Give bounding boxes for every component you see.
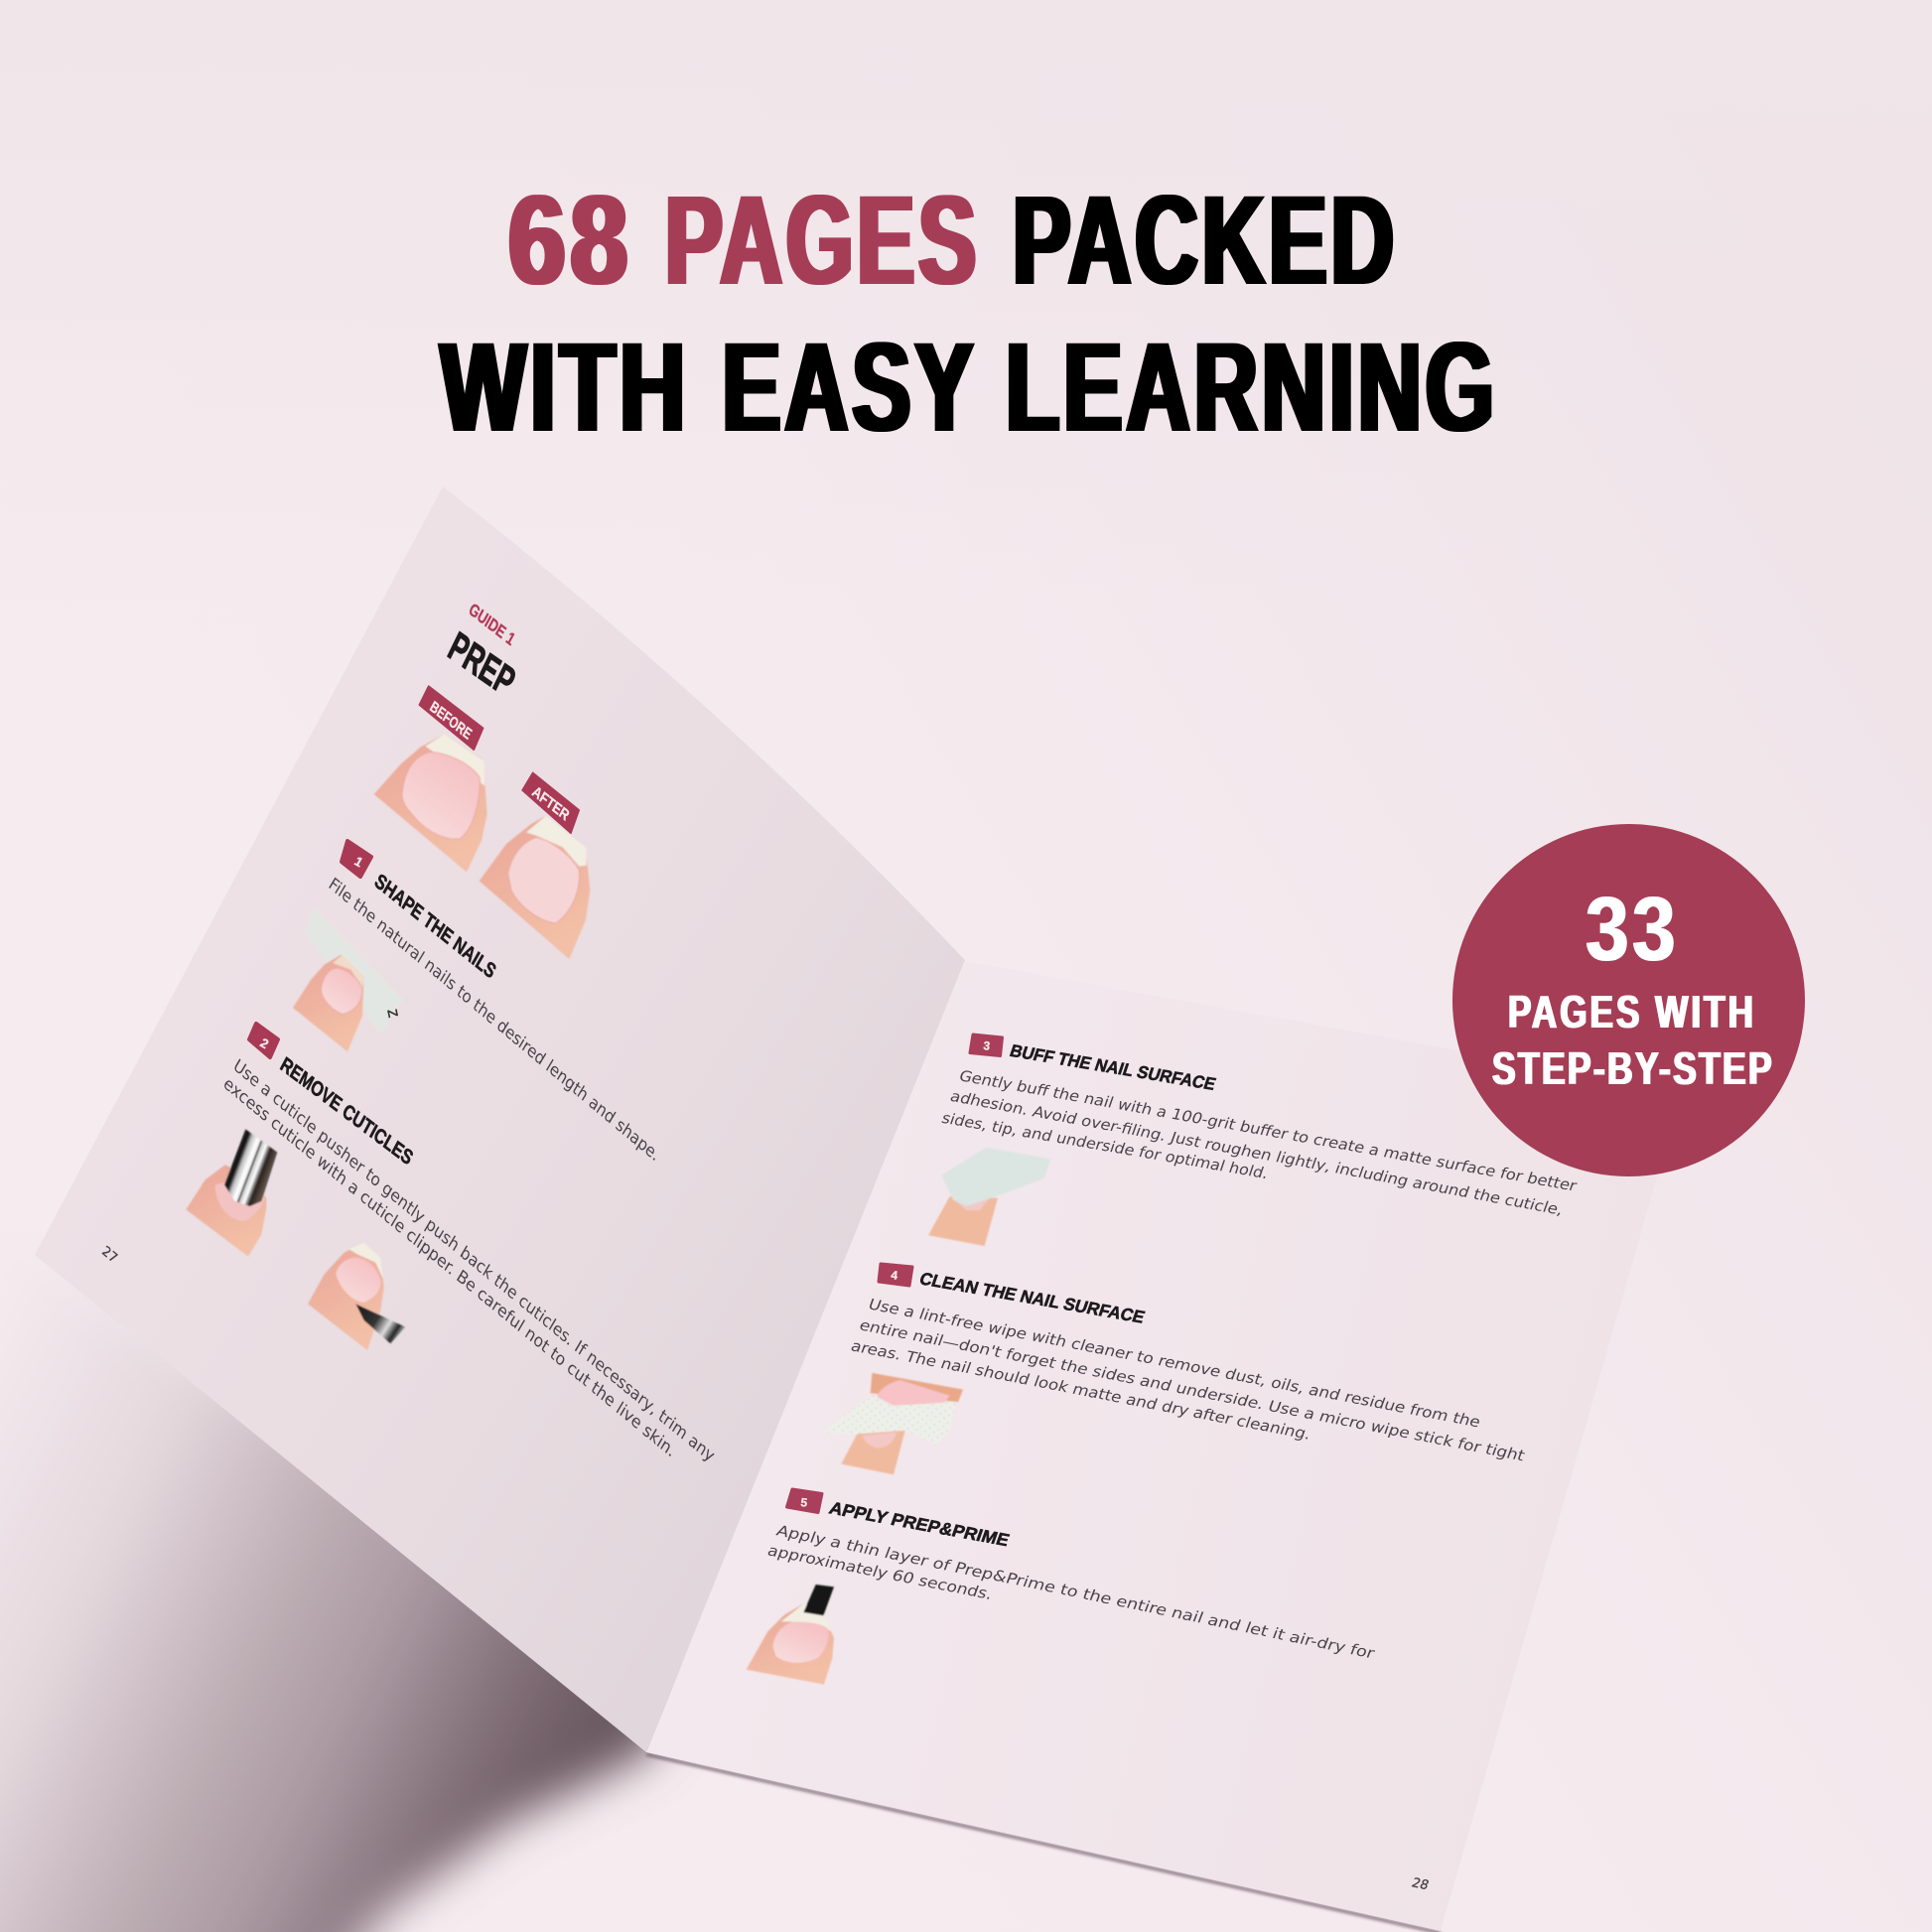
step 2 [220,1024,718,1465]
finger with wipe [821,1373,963,1474]
tag: after: AFTER [529,783,572,825]
body: apply line 1: Apply a thin layer of Prep&Prime to the entire nail and let it air-dry for [774,1522,1378,1662]
badge 1 [342,841,371,877]
right page sheet [646,961,1682,1931]
badge 5 [786,1489,822,1513]
body: remove cuticles line 1: Use a cuticle pusher to gently push back the cuticles. If necessary, trim any [230,1055,718,1465]
heading: prep: PREP [442,622,521,706]
body: buff line 3: sides, tip, and underside for optimal hold. [939,1109,1271,1182]
illustration: nail file on finger [293,908,403,1051]
body: buff line 2: adhesion. Avoid over-filing. Just roughen lightly, including around the cuticle, [948,1087,1566,1219]
before finger [374,734,487,872]
title line 1: 68 [508,170,632,312]
finger with chrome pusher [186,1129,277,1257]
title line 1: PACKED [1013,170,1398,312]
number 33: 33 [1586,879,1679,980]
badge 4: 4 [891,1268,898,1283]
illustrations: buffer, wipe [821,1148,1050,1474]
illustration: nail file on finger: Z [384,1008,402,1020]
badge 5: 5 [800,1495,808,1510]
title line 1: PAGES [665,170,980,312]
badge 2: 2 [258,1035,271,1051]
left page sheet [35,486,965,1752]
illustration: finger with black brush [747,1585,834,1685]
heading: clean the nail surface: CLEAN THE NAIL SURFACE [917,1269,1148,1327]
label: guide 1: GUIDE 1 [466,600,518,649]
step-by-step: STEP-BY-STEP [1492,1042,1774,1094]
pages with: PAGES WITH [1508,986,1756,1037]
page number 28: 28 [1410,1876,1431,1893]
badge: 33 pages [1452,824,1805,1176]
badge 1: 1 [351,854,365,870]
title line 2: WITH [441,317,689,459]
step 4 [849,1264,1527,1464]
thin contact shadow under right page [646,1754,1441,1932]
title line 2 [441,317,1498,459]
body: apply line 2: approximately 60 seconds. [765,1542,995,1603]
title line 1 [508,170,1398,312]
heading: apply prep and prime: APPLY PREP&PRIME [827,1498,1013,1550]
title line 2: EASY [723,317,977,459]
finger photos: before and after [374,734,590,959]
cast shadow under booklet [0,1142,695,1932]
right page [646,961,1682,1931]
heading: buff the nail surface: BUFF THE NAIL SURFACE [1008,1040,1218,1094]
finger with cuticle clipper [308,1243,405,1350]
title line 2: LEARNING [1006,317,1498,459]
after finger [480,816,590,959]
illustrations: cuticle pusher and clipper [186,1129,405,1350]
body: remove cuticles line 2: excess cuticle with a cuticle clipper. Be careful not to cut the live skin. [220,1073,679,1461]
badge circle [1452,824,1805,1176]
heading: shape the nails: SHAPE THE NAILS [370,870,499,984]
left page [35,486,965,1752]
heading: remove cuticles: REMOVE CUTICLES [277,1053,416,1171]
tag: after [522,772,579,833]
finger with buffer [928,1148,1050,1246]
tag: before: BEFORE [427,698,475,744]
step 5 [765,1489,1378,1662]
step 3 [939,1035,1581,1219]
booklet [35,486,1682,1931]
badge 2 [249,1024,278,1057]
tag: before [419,686,483,750]
title [441,170,1498,459]
body: buff line 1: Gently buff the nail with a 100-grit buffer to create a matte surface for better [957,1067,1581,1195]
badge 3 [970,1035,1003,1056]
step 1 [326,841,663,1165]
body: shape the nails: File the natural nails to the desired length and shape. [326,874,663,1165]
body: clean line 2: entire nail—don't forget the sides and underside. Use a micro wipe stick for tight [857,1316,1527,1464]
badge 4 [879,1264,912,1286]
badge 3: 3 [983,1038,991,1053]
page number 27: 27 [99,1244,119,1267]
body: clean line 3: areas. The nail should look matte and dry after cleaning. [849,1337,1313,1444]
body: clean line 1: Use a lint-free wipe with cleaner to remove dust, oils, and residue from the [866,1296,1483,1431]
